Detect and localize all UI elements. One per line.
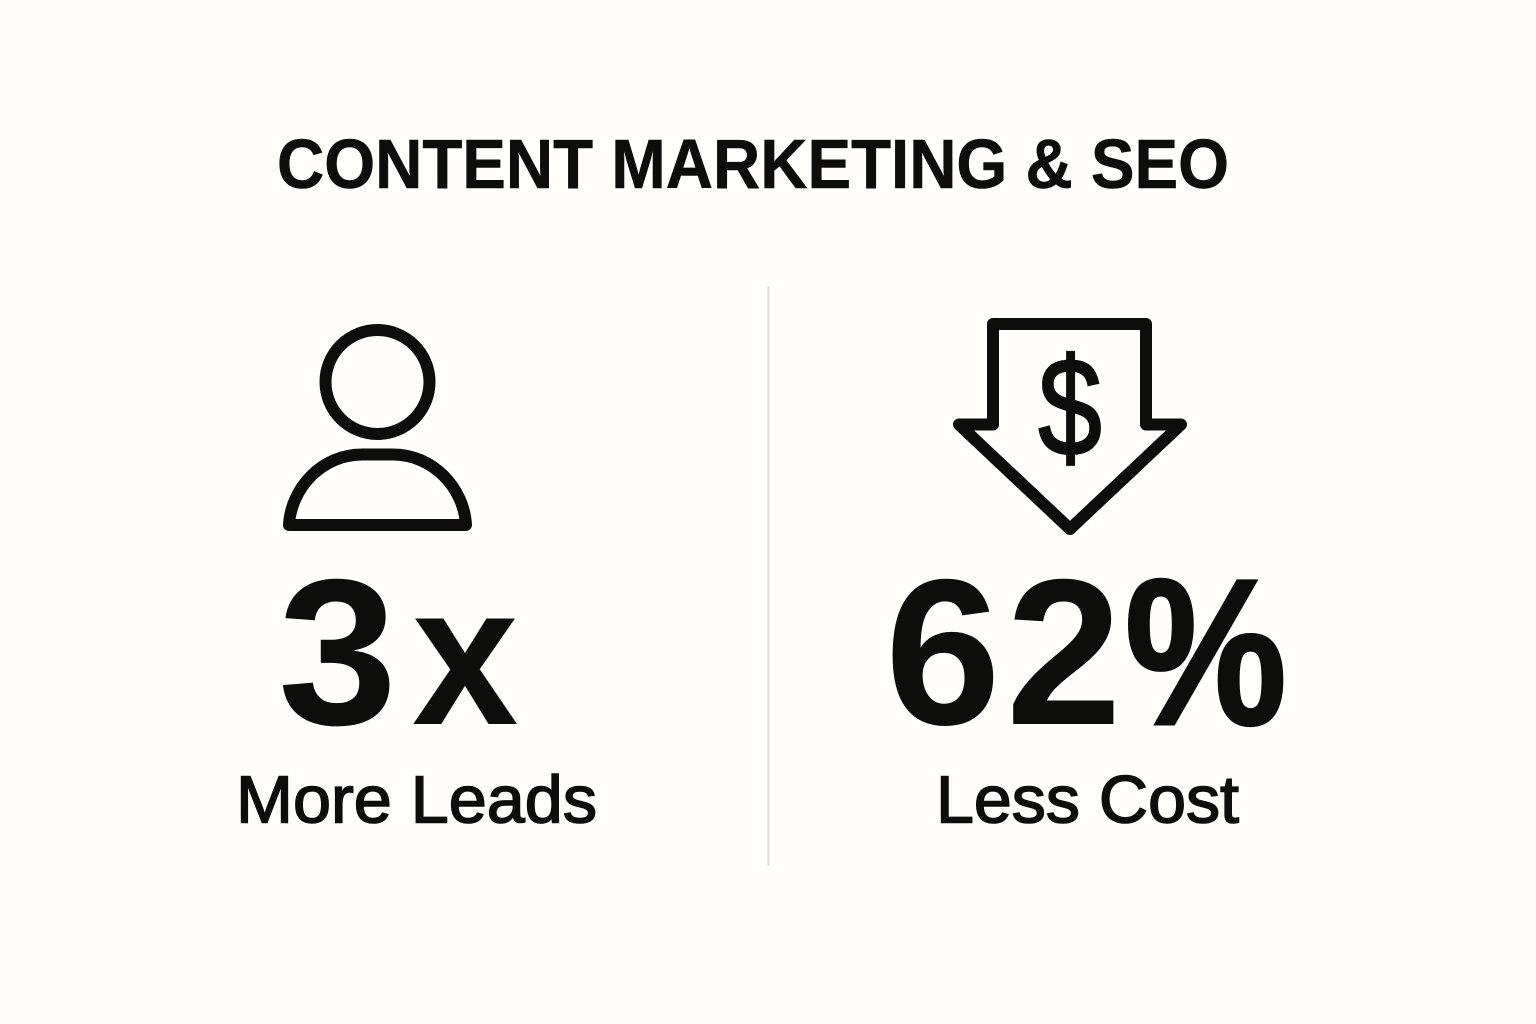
stat: 62%: % [1125, 537, 1287, 769]
label: less cost: Less Cost [936, 762, 1239, 838]
stat: 3x [278, 536, 518, 768]
stat: 3x: 3 [278, 536, 397, 768]
icon: down arrow with dollar [959, 324, 1181, 529]
stat: 62% [885, 537, 1287, 769]
panel: more leads [236, 330, 597, 838]
stat: 62%: 2 [1006, 537, 1122, 769]
label: more leads: More Leads [236, 762, 597, 838]
title: CONTENT MARKETING & SEO [277, 125, 1229, 203]
panel: less cost [885, 324, 1287, 838]
icon: person [289, 330, 466, 525]
stat: 62%: 6 [885, 537, 1001, 769]
dollar sign: $ [1038, 329, 1102, 485]
stat: 3x: x [412, 544, 518, 767]
